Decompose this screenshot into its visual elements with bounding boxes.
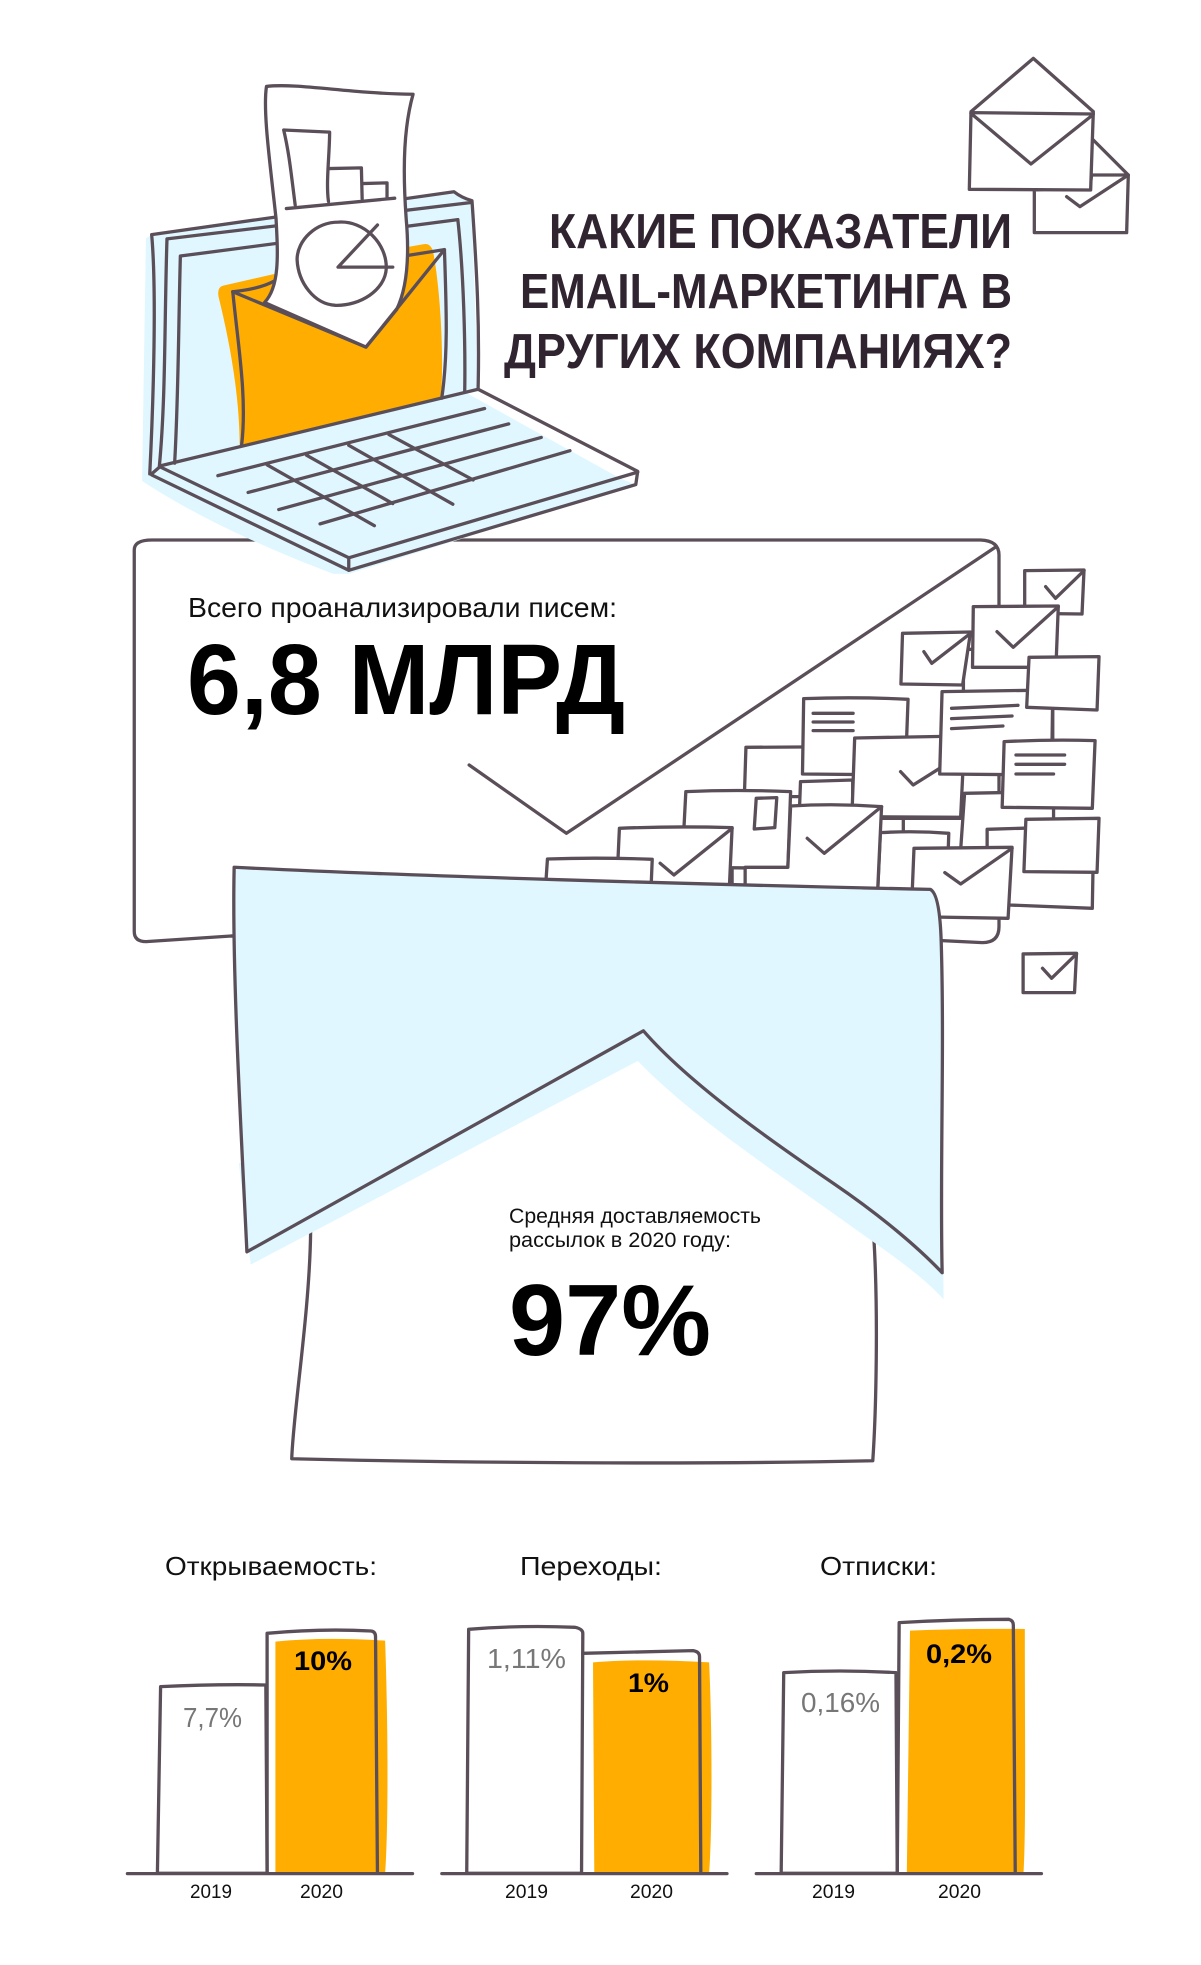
caption: deliverability: Средняя доставляемость	[509, 1205, 761, 1228]
envelope body	[292, 1232, 876, 1463]
back letter lower left	[744, 747, 856, 797]
heading: open rate: Открываемость:	[165, 1551, 377, 1581]
axis labels	[505, 1882, 673, 1903]
axis labels: 2020	[300, 1882, 343, 1903]
blue laptop fill	[142, 194, 636, 574]
panel: clicks chart	[442, 1551, 727, 1903]
blue flap	[234, 867, 942, 1273]
letter with check, front centre	[745, 805, 882, 892]
plain letter, far right	[1027, 657, 1099, 710]
back rectangle lower right	[987, 827, 1093, 908]
value 2020: 10%	[294, 1646, 352, 1676]
flap shadow	[239, 1023, 944, 1299]
plain letter, front left	[545, 858, 652, 888]
letter with check, upper left	[901, 632, 971, 685]
big envelope: frame	[134, 540, 999, 943]
value 2020: 1%	[628, 1668, 669, 1698]
bars	[442, 1627, 727, 1874]
orange envelope outline	[233, 250, 446, 445]
axis labels	[812, 1882, 981, 1903]
back letter	[963, 649, 1053, 743]
letter with text, centre right	[940, 690, 1053, 775]
bar chart on sheet	[284, 130, 395, 209]
pile of letters	[545, 570, 1099, 993]
axis labels: 2019	[812, 1882, 855, 1903]
back rectangle right	[961, 792, 1054, 850]
laptop illustration	[142, 86, 638, 574]
heading: unsubscribes: Отписки:	[820, 1551, 937, 1581]
title	[504, 205, 1012, 379]
small back rectangle	[799, 780, 853, 813]
heading: clicks: Переходы:	[520, 1551, 662, 1581]
bars	[127, 1630, 413, 1874]
lower envelope	[234, 867, 944, 1463]
caption line two: рассылок в 2020 году:	[509, 1229, 731, 1252]
value 2019: 7,7%	[183, 1702, 242, 1733]
letter with stamp	[682, 790, 791, 868]
pie chart on sheet	[297, 222, 393, 305]
keyboard	[152, 389, 638, 570]
big envelope: stat text	[187, 592, 625, 736]
title: EMAIL-МАРКЕТИНГА В	[520, 265, 1012, 319]
stat: deliverability	[509, 1205, 761, 1377]
letter with check, centre	[852, 736, 965, 817]
axis labels: 2019	[190, 1882, 232, 1903]
value 2020: 0,2%	[926, 1639, 992, 1669]
axis labels	[190, 1882, 343, 1903]
title: ДРУГИХ КОМПАНИЯХ?	[504, 325, 1012, 379]
value 97%: 97%	[509, 1265, 711, 1377]
letter with check, front left	[617, 827, 732, 888]
sheet with charts	[233, 86, 444, 347]
axis labels: 2020	[630, 1882, 673, 1903]
orange envelope backing	[218, 244, 442, 447]
letter with text, left	[802, 698, 908, 775]
lone letter with check	[1023, 953, 1076, 993]
stat: 6,8 billion: 6,8 МЛРД	[187, 624, 625, 736]
icon: pair of envelopes	[969, 58, 1128, 233]
panel: unsubscribes chart	[756, 1551, 1041, 1903]
title: КАКИЕ ПОКАЗАТЕЛИ	[549, 205, 1012, 259]
letter with text, right	[1002, 740, 1095, 808]
front envelope	[969, 58, 1093, 190]
axis labels: 2020	[938, 1882, 981, 1903]
lid lines	[150, 192, 479, 474]
value 2019: 0,16%	[801, 1687, 880, 1718]
caption: letters analysed: Всего проанализировали писем:	[188, 592, 617, 623]
letter with check, top right	[1025, 570, 1084, 614]
panel: open rate chart	[127, 1551, 413, 1903]
back rectangles lower centre	[732, 818, 961, 887]
bars	[756, 1619, 1041, 1874]
axis labels: 2019	[505, 1882, 548, 1903]
value 2019: 1,11%	[487, 1643, 566, 1674]
letter with check, top centre	[973, 606, 1058, 667]
plain letter, lower right	[1024, 818, 1099, 872]
letter with check, lower right	[911, 847, 1012, 918]
rear envelope	[1034, 140, 1128, 233]
envelope flap lines	[233, 250, 444, 347]
